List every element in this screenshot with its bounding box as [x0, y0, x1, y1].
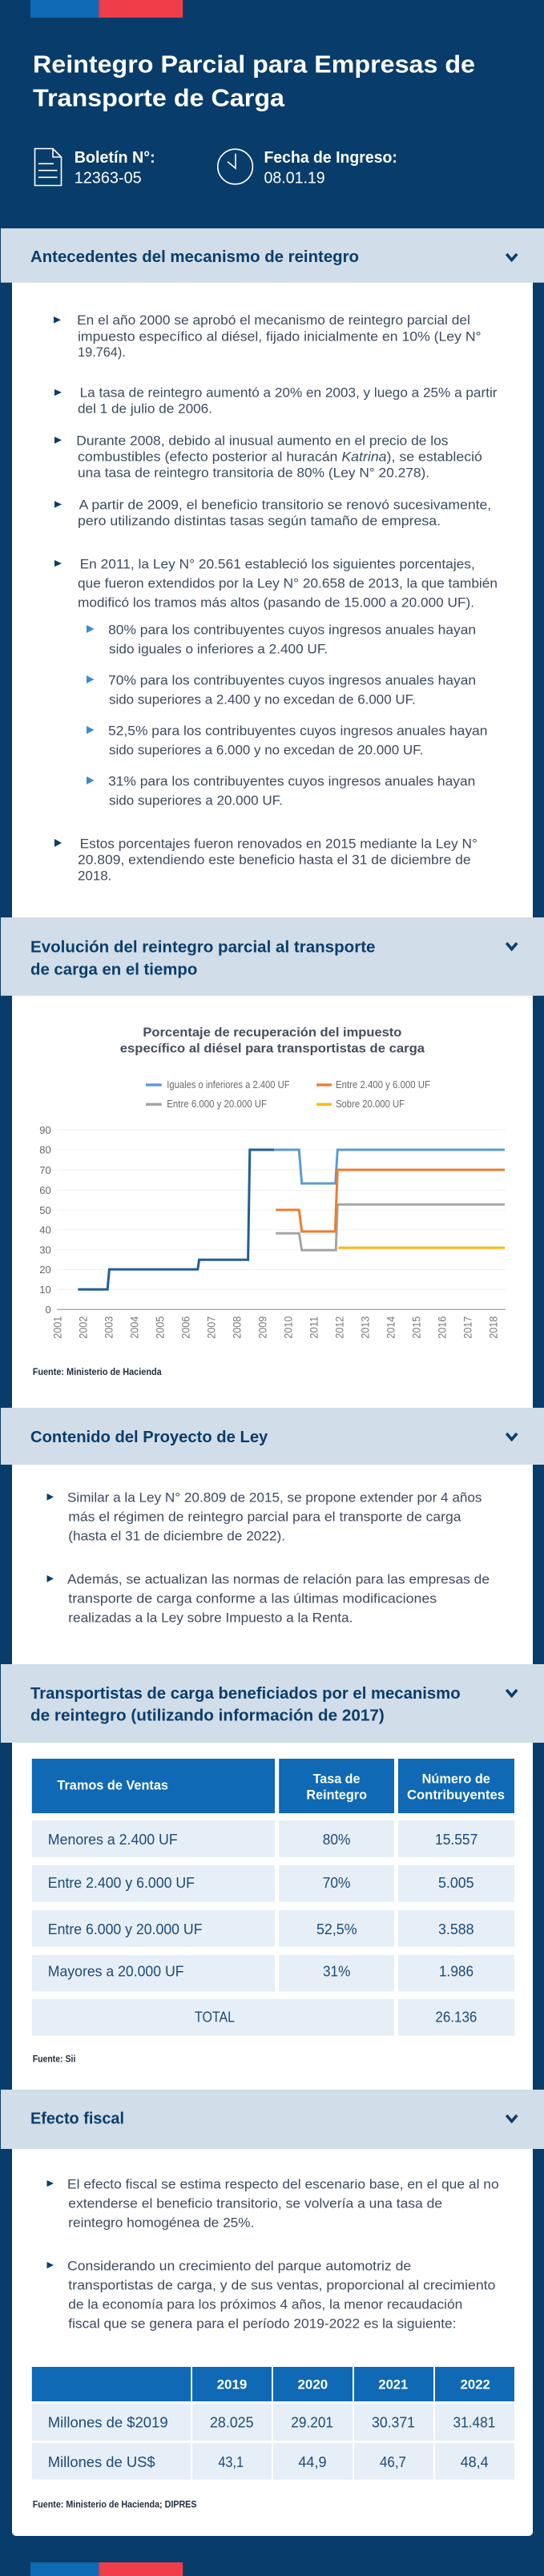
chart legend	[146, 1079, 430, 1110]
paragraph: estos porcentajes: 20.809, extendiendo este beneficio hasta el 31 de diciembre de	[78, 853, 471, 868]
paragraph: año 2000: impuesto específico al diésel, fijado inicialmente en 10% (Ley N°	[78, 329, 482, 344]
icon: bottom flag bar	[30, 2562, 183, 2576]
paragraph: estos porcentajes: 2018.	[78, 869, 111, 884]
table: tramos de ventas	[32, 1759, 514, 2036]
x axis labels	[51, 1316, 499, 1339]
row: millones de US$: Millones de US$	[48, 2454, 155, 2470]
y axis labels: 50	[39, 1204, 51, 1216]
source: ministerio de hacienda; dipres: Fuente: Ministerio de Hacienda; DIPRES	[33, 2501, 197, 2510]
bullet list: main items	[54, 316, 62, 847]
paragraph: similar a la ley: más el régimen de reintegro parcial para el transporte de carga	[68, 1510, 461, 1524]
row: entre 2.400 y 6.000 UF: 5.005	[438, 1875, 474, 1891]
table header: Tramos de Ventas	[57, 1777, 168, 1792]
row: millones de $2019: Millones de $2019	[48, 2415, 168, 2431]
chart legend: Iguales o inferiores a 2.400 UF	[167, 1079, 290, 1090]
series: tasa unica	[78, 1150, 274, 1289]
row: total: TOTAL	[195, 2010, 235, 2026]
bullet markers	[46, 2180, 54, 2268]
row: millones de $2019: 31.481	[453, 2415, 495, 2431]
x axis labels: 2015	[410, 1316, 422, 1339]
paragraph: año 2000: En el año 2000 se aprobó el mecanismo de reintegro parcial del	[77, 313, 470, 328]
panel: antecedentes heading: Antecedentes del mecanismo de reintegro	[30, 248, 359, 266]
row: menores a 2.400 UF: 15.557	[435, 1832, 478, 1848]
chart title	[120, 1026, 425, 1055]
paragraph: en 2011: modificó los tramos más altos (pasando de 15.000 a 20.000 UF).	[78, 595, 474, 610]
row: entre 2.400 y 6.000 UF	[32, 1865, 514, 1902]
sub-item: 70%	[108, 674, 476, 707]
paragraph: considerando: transportistas de carga, y de sus ventas, proporcional al crecimiento	[68, 2278, 495, 2292]
paragraph: ademas: Además, se actualizan las normas de relación para las empresas de	[67, 1572, 490, 1586]
paragraph: durante 2008: combustibles (efecto posterior al huracán Katrina), se estableció	[78, 449, 482, 464]
panel: evolucion heading	[1, 917, 544, 996]
panel: transportistas heading	[1, 1664, 544, 1743]
paragraph: considerando: de la economía para los próximos 4 años, la menor recaudación	[68, 2297, 462, 2312]
row: entre 2.400 y 6.000 UF: Entre 2.400 y 6.000 UF	[48, 1875, 195, 1891]
table header: 2019	[217, 2377, 247, 2393]
paragraph: en 2011	[78, 557, 498, 610]
paragraph: año 2000: 19.764).	[78, 345, 126, 360]
x axis labels: 2016	[436, 1316, 448, 1339]
source: ministerio de hacienda: Fuente: Ministerio de Hacienda	[33, 1368, 162, 1377]
row: millones de $2019: 28.025	[210, 2415, 253, 2431]
y axis labels: 70	[39, 1164, 51, 1176]
chart legend: Entre 6.000 y 20.000 UF	[167, 1099, 267, 1110]
row: entre 6.000 y 20.000 UF	[32, 1910, 514, 1947]
table header: Número de	[422, 1771, 490, 1786]
sub-item: 52,5%: 52,5% para los contribuyentes cuyos ingresos anuales hayan	[108, 724, 487, 739]
panel: contenido heading: Contenido del Proyecto de Ley	[30, 1428, 268, 1446]
row: menores a 2.400 UF: Menores a 2.400 UF	[48, 1832, 178, 1848]
panel: transportistas heading: Transportistas de carga beneficiados por el mecanismo	[30, 1684, 461, 1703]
title: Reintegro Parcial para Empresas de	[33, 50, 475, 79]
paragraph: en 2011: que fueron extendidos por la Ley N° 20.658 de 2013, la que también	[78, 576, 498, 591]
panel: efecto fiscal heading: Efecto fiscal	[30, 2110, 124, 2128]
sub-item: 80%: sido iguales o inferiores a 2.400 UF.	[109, 643, 328, 657]
series: entre 2.400 y 6.000 UF	[276, 1170, 505, 1232]
sub-item: 52,5%	[108, 724, 487, 758]
sub-item: 70%: 70% para los contribuyentes cuyos ingresos anuales hayan	[108, 674, 476, 688]
panel: antecedentes heading	[1, 228, 544, 283]
row: menores a 2.400 UF	[32, 1820, 514, 1857]
table header: Reintegro	[306, 1787, 367, 1802]
paragraph: en 2011: En 2011, la Ley N° 20.561 estableció los siguientes porcentajes,	[80, 557, 475, 571]
paragraph: ademas: transporte de carga conforme a las últimas modificaciones	[68, 1591, 437, 1606]
text block: contenido	[46, 1490, 490, 1625]
chart title: específico al diésel para transportistas de carga	[120, 1042, 425, 1055]
sub-item: 52,5%: sido superiores a 6.000 y no excedan de 20.000 UF.	[109, 744, 423, 758]
text: boletin: Boletín N°:	[75, 149, 155, 167]
text: fecha de ingreso: 08.01.19	[264, 170, 325, 187]
row: entre 6.000 y 20.000 UF: 3.588	[438, 1921, 474, 1937]
series: sobre 20.000 UF	[338, 1247, 505, 1249]
row: mayores a 20.000 UF: Mayores a 20.000 UF	[48, 1964, 183, 1980]
text block: antecedentes	[54, 313, 498, 884]
table header	[32, 2367, 514, 2401]
series: iguales o inferiores a 2.400 UF	[274, 1150, 505, 1183]
series: entre 6.000 y 20.000 UF	[276, 1204, 505, 1250]
paragraph: considerando: Considerando un crecimiento del parque automotriz de	[67, 2259, 411, 2273]
x axis labels: 2014	[385, 1316, 397, 1339]
paragraph: tasa 2003	[78, 385, 498, 416]
source: sii: Fuente: Sii	[33, 2055, 75, 2065]
chart legend: Entre 2.400 y 6.000 UF	[336, 1079, 430, 1090]
paragraph: durante 2008: Durante 2008, debido al inusual aumento en el precio de los	[76, 433, 449, 448]
icon: top flag bar	[30, 0, 183, 18]
x axis labels: 2017	[461, 1316, 473, 1339]
row: mayores a 20.000 UF: 1.986	[439, 1964, 473, 1980]
bullet markers	[46, 1494, 54, 1582]
sub-item: 80%: 80% para los contribuyentes cuyos ingresos anuales hayan	[108, 623, 476, 638]
y axis labels: 90	[39, 1124, 51, 1136]
x axis labels: 2010	[282, 1316, 294, 1339]
paragraph: similar a la ley: (hasta el 31 de diciembre de 2022).	[68, 1529, 285, 1543]
panel: efecto fiscal heading	[1, 2090, 544, 2149]
row: millones de US$: 46,7	[380, 2454, 406, 2470]
paragraph: estos porcentajes	[78, 837, 478, 884]
table: efecto fiscal	[32, 2367, 514, 2480]
sub-item: 31%: 31% para los contribuyentes cuyos ingresos anuales hayan	[108, 775, 475, 789]
x axis labels: 2008	[231, 1316, 243, 1339]
paragraph: a partir de 2009: A partir de 2009, el beneficio transitorio se renovó sucesivamente,	[79, 498, 491, 512]
x axis labels: 2002	[77, 1316, 89, 1339]
y axis labels: 10	[39, 1284, 51, 1296]
paragraph: escenario base: extenderse el beneficio transitorio, se volvería a una tasa de	[68, 2196, 442, 2211]
table header: 2022	[461, 2377, 490, 2393]
paragraph: considerando	[67, 2259, 495, 2331]
row: entre 6.000 y 20.000 UF: Entre 6.000 y 20.000 UF	[48, 1921, 202, 1937]
row: entre 2.400 y 6.000 UF: 70%	[323, 1875, 350, 1891]
panel: evolucion heading: de carga en el tiempo	[30, 960, 197, 978]
paragraph: durante 2008: una tasa de reintegro transitoria de 80% (Ley N° 20.278).	[78, 466, 429, 480]
x axis labels: 2006	[179, 1316, 191, 1339]
sub-item: 31%: sido superiores a 20.000 UF.	[109, 794, 283, 808]
paragraph: similar a la ley	[67, 1490, 482, 1543]
icon: clock	[218, 149, 252, 184]
text: fecha de ingreso	[264, 149, 397, 187]
paragraph: estos porcentajes: Estos porcentajes fueron renovados en 2015 mediante la Ley N°	[80, 837, 478, 852]
text block: efecto fiscal	[46, 2177, 499, 2331]
paragraph: año 2000	[77, 313, 482, 360]
x axis labels: 2011	[308, 1316, 320, 1339]
y axis labels: 80	[39, 1144, 51, 1156]
row: millones de $2019: 30.371	[372, 2415, 415, 2431]
sub-item: 70%: sido superiores a 2.400 y no excedan de 6.000 UF.	[109, 693, 416, 707]
text: fecha de ingreso: Fecha de Ingreso:	[264, 149, 397, 167]
row: total	[32, 1999, 514, 2036]
line chart	[39, 1124, 506, 1339]
x axis labels: 2005	[154, 1316, 166, 1339]
paragraph: a partir de 2009	[78, 498, 491, 528]
bullet list: sub items	[87, 625, 95, 784]
panel: evolucion heading: Evolución del reintegro parcial al transporte	[30, 938, 375, 957]
y axis labels: 40	[39, 1223, 51, 1236]
row: entre 6.000 y 20.000 UF: 52,5%	[316, 1921, 357, 1937]
row: millones de US$	[32, 2443, 514, 2480]
table header	[32, 1759, 514, 1813]
table header: Tasa de	[313, 1771, 361, 1786]
paragraph: tasa 2003: del 1 de julio de 2006.	[78, 401, 212, 416]
sub-item: 80%	[108, 623, 476, 657]
x axis labels: 2012	[333, 1316, 345, 1339]
title	[33, 50, 475, 111]
x axis labels: 2003	[103, 1316, 115, 1339]
x axis labels: 2009	[256, 1316, 268, 1339]
paragraph: ademas	[67, 1572, 490, 1625]
title: Transporte de Carga	[33, 83, 285, 111]
row: mayores a 20.000 UF	[32, 1955, 514, 1992]
paragraph: escenario base	[67, 2177, 499, 2230]
y axis labels: 20	[39, 1264, 51, 1276]
sub-item: 31%	[108, 775, 475, 808]
row: mayores a 20.000 UF: 31%	[323, 1964, 350, 1980]
chart title: Porcentaje de recuperación del impuesto	[143, 1026, 402, 1039]
paragraph: similar a la ley: Similar a la Ley N° 20.809 de 2015, se propone extender por 4 años	[67, 1490, 482, 1505]
x axis labels: 2001	[51, 1316, 63, 1339]
panel: contenido heading	[1, 1408, 544, 1465]
row: millones de US$: 44,9	[298, 2454, 327, 2470]
y axis labels: 60	[39, 1184, 51, 1196]
y axis labels	[39, 1124, 51, 1316]
paragraph: escenario base: El efecto fiscal se estima respecto del escenario base, en el que al no	[67, 2177, 499, 2191]
chart legend: Sobre 20.000 UF	[336, 1099, 405, 1110]
paragraph: considerando: fiscal que se genera para el período 2019-2022 es la siguiente:	[68, 2316, 457, 2331]
paragraph: a partir de 2009: pero utilizando distintas tasas según tamaño de empresa.	[78, 514, 441, 528]
x axis labels: 2004	[128, 1316, 140, 1339]
y axis labels: 30	[39, 1244, 51, 1256]
paragraph: escenario base: reintegro homogénea de 25%.	[68, 2215, 254, 2230]
text: boletin: 12363-05	[75, 170, 142, 187]
paragraph: durante 2008	[76, 433, 482, 480]
paragraph: tasa 2003: La tasa de reintegro aumentó a 20% en 2003, y luego a 25% a partir	[80, 385, 498, 400]
row: millones de $2019: 29.201	[291, 2415, 333, 2431]
x axis labels: 2013	[359, 1316, 371, 1339]
row: millones de US$: 48,4	[461, 2454, 489, 2470]
panel: transportistas heading: de reintegro (utilizando información de 2017)	[30, 1707, 385, 1725]
table header: 2021	[378, 2377, 408, 2393]
x axis labels: 2018	[487, 1316, 499, 1339]
table header: 2020	[298, 2377, 328, 2393]
text: boletin	[75, 149, 155, 187]
row: millones de US$: 43,1	[218, 2454, 244, 2470]
table header: Contribuyentes	[407, 1787, 505, 1802]
y axis labels: 0	[45, 1304, 51, 1316]
row: menores a 2.400 UF: 80%	[323, 1832, 350, 1848]
x axis labels: 2007	[205, 1316, 217, 1339]
paragraph: ademas: realizadas a la Ley sobre Impuesto a la Renta.	[68, 1611, 353, 1625]
icon: document	[35, 149, 61, 186]
row: millones de $2019	[32, 2404, 514, 2441]
row: total: 26.136	[435, 2010, 477, 2026]
